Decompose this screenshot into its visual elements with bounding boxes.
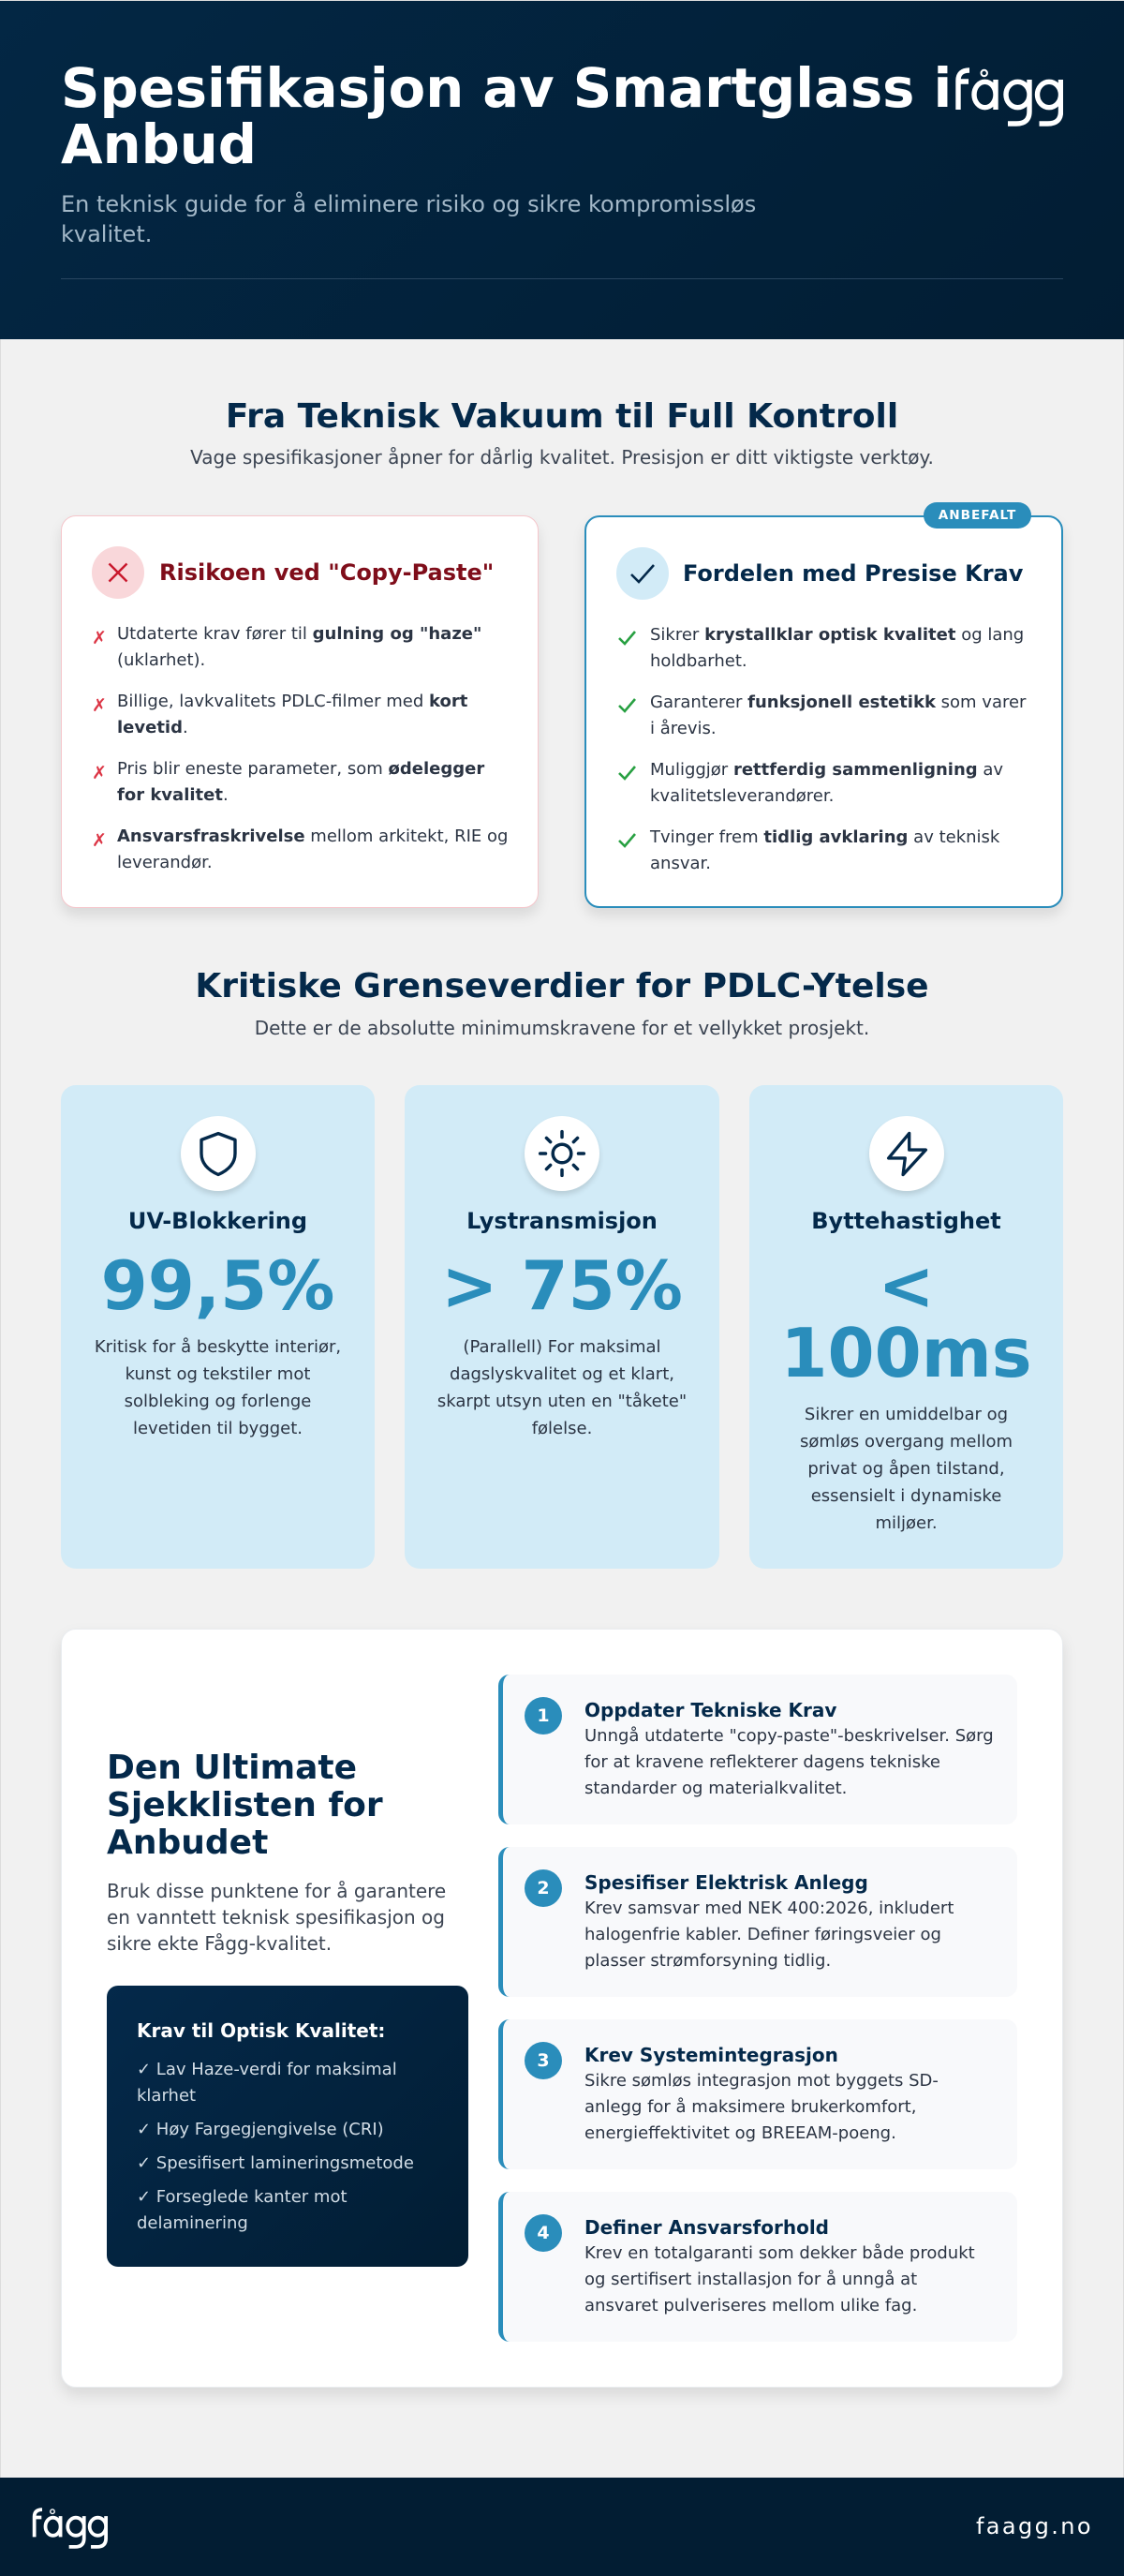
step title: Krev Systemintegrasjon xyxy=(584,2044,838,2066)
footer xyxy=(0,2478,1124,2576)
description xyxy=(800,1405,1013,1533)
risk item 4 xyxy=(92,826,508,872)
benefit item 4: ansvar. xyxy=(650,854,711,873)
callout item 1: klarhet xyxy=(137,2086,196,2106)
description: Sikrer en umiddelbar og xyxy=(805,1405,1008,1424)
step text xyxy=(584,1898,954,1971)
icon: lightning xyxy=(869,1116,944,1191)
risk item 1: (uklarhet). xyxy=(117,650,205,670)
description: følelse. xyxy=(532,1419,592,1438)
checklist intro: Bruk disse punktene for å garantere xyxy=(107,1880,446,1902)
callout item 4 xyxy=(137,2187,348,2233)
risk item 3: for kvalitet. xyxy=(117,785,229,805)
step text: og sertifisert installasjon for å unngå at xyxy=(584,2270,917,2289)
label: Lystransmisjon xyxy=(466,1208,658,1234)
risk item 2: levetid. xyxy=(117,718,188,737)
number badge xyxy=(525,2214,562,2252)
panel: UV-Blokkering xyxy=(61,1085,375,1569)
description: solbleking og forlenge xyxy=(125,1392,311,1411)
checklist heading: Den Ultimate xyxy=(107,1749,357,1787)
step text: plasser strømforsyning tidlig. xyxy=(584,1951,831,1971)
callout item 4: ✓ Forseglede kanter mot xyxy=(137,2187,348,2207)
title: Anbud xyxy=(61,113,257,176)
description: kunst og tekstiler mot xyxy=(126,1364,310,1384)
icon: shield xyxy=(181,1116,256,1191)
value: 99,5% xyxy=(101,1246,334,1325)
step 4 xyxy=(498,2192,1017,2342)
checklist intro: en vanntett teknisk spesifikasjon og xyxy=(107,1906,445,1928)
step text xyxy=(584,1726,994,1798)
step title: Definer Ansvarsforhold xyxy=(584,2216,829,2239)
heading: Fra Teknisk Vakuum til Full Kontroll: Fra Teknisk Vakuum til Full Kontroll xyxy=(226,397,898,436)
step text: anlegg for å maksimere brukerkomfort, xyxy=(584,2097,916,2117)
value: < xyxy=(878,1246,935,1325)
risk item 1 xyxy=(92,624,481,670)
website: faagg.no xyxy=(976,2513,1093,2539)
step text: Sikre sømløs integrasjon mot byggets SD- xyxy=(584,2071,939,2091)
risk item 2: Billige, lavkvalitets PDLC-filmer med kort xyxy=(117,692,467,711)
value: 100ms xyxy=(780,1314,1032,1392)
icon: fågg logo xyxy=(32,2508,108,2549)
number badge: 1 xyxy=(537,1705,550,1726)
benefits list xyxy=(618,625,1027,873)
callout item 1 xyxy=(137,2060,397,2106)
checklist heading: Anbudet xyxy=(107,1824,268,1862)
step text xyxy=(584,2071,939,2143)
description: skarpt utsyn uten en "tåkete" xyxy=(437,1392,687,1411)
intro text: section 2: Dette er de absolutte minimumskravene for et vellykket prosjekt. xyxy=(255,1017,869,1039)
icon: sun xyxy=(525,1116,599,1191)
header banner xyxy=(0,1,1124,339)
subtitle xyxy=(61,191,756,247)
badge: anbefalt: ANBEFALT xyxy=(939,508,1016,523)
number badge: 4 xyxy=(537,2223,550,2243)
benefit item 2: i årevis. xyxy=(650,719,717,738)
icon: check xyxy=(616,547,669,600)
icon: red cross xyxy=(92,546,144,599)
panel: Lystransmisjon xyxy=(405,1085,719,1569)
risk item 3: ✗ xyxy=(92,763,107,783)
benefit item 3: kvalitetsleverandører. xyxy=(650,786,834,806)
value xyxy=(780,1246,1032,1392)
step 3 xyxy=(498,2019,1017,2169)
benefit item 2: Garanterer funksjonell estetikk som varer xyxy=(650,692,1026,712)
step text: ansvaret pulveriseres mellom ulike fag. xyxy=(584,2296,917,2315)
description: sømløs overgang mellom xyxy=(800,1432,1013,1452)
callout heading: Krav til Optisk Kvalitet: xyxy=(137,2019,385,2042)
risks list xyxy=(92,624,508,872)
label: Byttehastighet xyxy=(811,1208,1001,1234)
callout item 4: delaminering xyxy=(137,2213,248,2233)
checklist intro xyxy=(107,1880,446,1955)
risk item 2 xyxy=(92,692,467,737)
benefit item 3: Muliggjør rettferdig sammenligning av xyxy=(650,760,1003,780)
number badge: 2 xyxy=(537,1878,550,1898)
description: privat og åpen tilstand, xyxy=(807,1459,1005,1479)
subtitle: kvalitet. xyxy=(61,221,152,247)
description xyxy=(437,1337,687,1438)
step title: Oppdater Tekniske Krav xyxy=(584,1699,836,1721)
step text: for at kravene reflekterer dagens tekniske xyxy=(584,1752,940,1772)
panel: Byttehastighet xyxy=(749,1085,1063,1569)
description: Kritisk for å beskytte interiør, xyxy=(95,1337,341,1357)
badge: anbefalt xyxy=(924,502,1031,529)
risk item 2: ✗ xyxy=(92,695,107,716)
benefit item 1 xyxy=(618,625,1024,671)
subtitle: En teknisk guide for å eliminere risiko og sikre kompromissløs xyxy=(61,191,756,217)
title xyxy=(61,57,952,176)
step 1 xyxy=(498,1675,1017,1824)
checklist intro: sikre ekte Fågg-kvalitet. xyxy=(107,1932,332,1955)
step title: Spesifiser Elektrisk Anlegg xyxy=(584,1871,868,1894)
step text: energieffektivitet og BREEAM-poeng. xyxy=(584,2123,896,2143)
description: (Parallell) For maksimal xyxy=(463,1337,661,1357)
benefit item 1: Sikrer krystallklar optisk kvalitet og lang xyxy=(650,625,1024,645)
icon: fågg logo xyxy=(955,67,1063,127)
panel: benefits xyxy=(584,515,1063,908)
step text: Krev en totalgaranti som dekker både produkt xyxy=(584,2243,975,2263)
checklist heading: Sjekklisten for xyxy=(107,1786,383,1824)
step text: standarder og materialkvalitet. xyxy=(584,1779,847,1798)
risk item 4: ✗ xyxy=(92,830,107,851)
callout: optical quality xyxy=(107,1986,468,2267)
benefit item 4: Tvinger frem tidlig avklaring av teknisk xyxy=(650,827,999,847)
step text: Krev samsvar med NEK 400:2026, inkludert xyxy=(584,1898,954,1918)
risk item 3: Pris blir eneste parameter, som ødelegger xyxy=(117,759,484,779)
benefits heading: Fordelen med Presise Krav xyxy=(683,560,1023,587)
checklist heading xyxy=(107,1749,383,1862)
step text: halogenfrie kabler. Definer føringsveier og xyxy=(584,1925,941,1944)
step 2 xyxy=(498,1847,1017,1997)
description: miljøer. xyxy=(875,1513,938,1533)
label: UV-Blokkering xyxy=(128,1208,307,1234)
number badge xyxy=(525,2042,562,2079)
risk item 1: Utdaterte krav fører til gulning og "haze" xyxy=(117,624,481,644)
benefit item 4 xyxy=(618,827,1000,873)
callout item 1: ✓ Lav Haze-verdi for maksimal xyxy=(137,2060,397,2079)
intro text: section 1: Vage spesifikasjoner åpner for dårlig kvalitet. Presisjon er ditt viktigste verktøy. xyxy=(190,446,934,469)
value: > 75% xyxy=(441,1246,683,1325)
description xyxy=(95,1337,341,1438)
benefit item 2 xyxy=(618,692,1027,738)
panel: risks xyxy=(61,515,539,908)
benefit item 1: holdbarhet. xyxy=(650,651,747,671)
risk item 4: leverandør. xyxy=(117,853,213,872)
step text xyxy=(584,2243,975,2315)
callout item 3: ✓ Spesifisert lamineringsmetode xyxy=(137,2153,414,2173)
description: essensielt i dynamiske xyxy=(811,1486,1001,1506)
number badge xyxy=(525,1697,562,1735)
number badge xyxy=(525,1869,562,1907)
risk item 4: Ansvarsfraskrivelse mellom arkitekt, RIE og xyxy=(117,826,508,846)
callout item 2: ✓ Høy Fargegjengivelse (CRI) xyxy=(137,2120,384,2139)
number badge: 3 xyxy=(537,2050,550,2071)
heading: Kritiske Grenseverdier: Kritiske Grenseverdier for PDLC-Ytelse xyxy=(195,967,929,1005)
description: levetiden til bygget. xyxy=(133,1419,303,1438)
step text: Unngå utdaterte "copy-paste"-beskrivelser. Sørg xyxy=(584,1726,994,1746)
risk item 3 xyxy=(92,759,485,805)
risk item 1: ✗ xyxy=(92,628,107,648)
risks heading: Risikoen ved "Copy-Paste" xyxy=(159,559,494,586)
panel: checklist xyxy=(61,1629,1063,2388)
title: Spesifikasjon av Smartglass i xyxy=(61,57,952,120)
benefit item 3 xyxy=(618,760,1003,806)
description: dagslyskvalitet og et klart, xyxy=(450,1364,674,1384)
